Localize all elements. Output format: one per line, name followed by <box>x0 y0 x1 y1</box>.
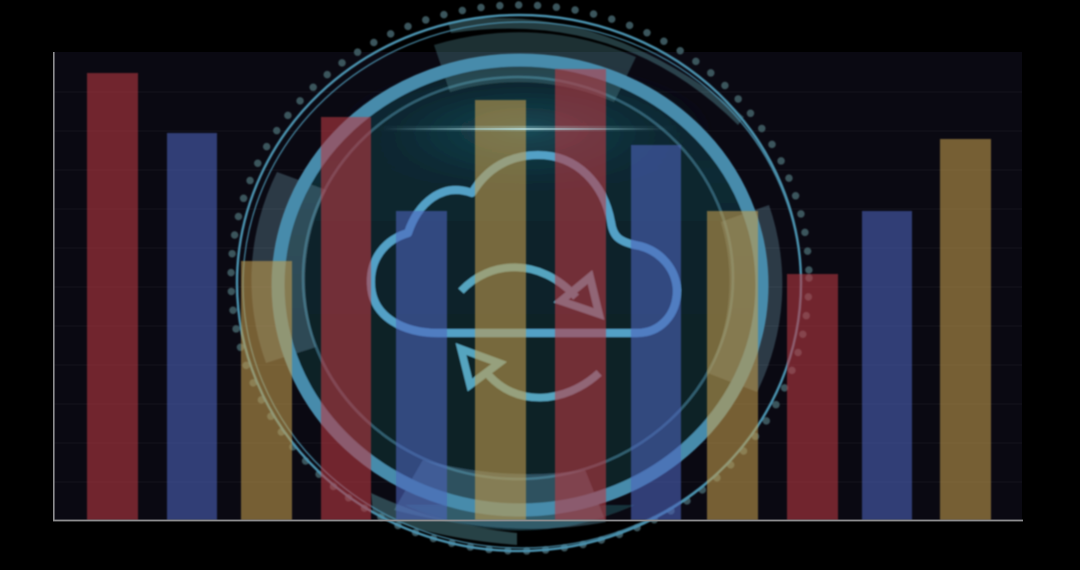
bar 6 <box>475 100 526 520</box>
bar 4 <box>321 117 371 520</box>
bar 5 <box>396 211 447 520</box>
bottom thin sector <box>371 493 517 545</box>
bar chart <box>87 69 991 520</box>
bar 8 <box>631 145 681 520</box>
bar 9 <box>707 211 758 520</box>
cloud outline <box>371 155 677 333</box>
HUD back layer <box>231 5 809 551</box>
bar 1 <box>87 73 138 520</box>
inner disc <box>278 60 762 510</box>
sync arrow upper <box>461 267 599 314</box>
bar 12 <box>940 139 991 520</box>
bar 11 <box>862 211 912 520</box>
bar 10 <box>787 274 838 520</box>
left sector <box>251 172 326 363</box>
bar 3 <box>241 261 292 520</box>
bottom sector <box>394 460 606 529</box>
top thin sector <box>448 18 744 125</box>
right sector <box>708 205 782 392</box>
bar 7 <box>555 69 606 520</box>
top sector <box>434 32 636 102</box>
inner band tint <box>303 77 733 479</box>
bar 2 <box>167 133 217 520</box>
sync arrow lower <box>461 349 599 398</box>
chart plot area <box>54 52 1022 520</box>
chart axes <box>53 52 1023 521</box>
outer double ring <box>237 15 801 551</box>
dark lower halo <box>405 505 635 530</box>
flare glow <box>330 58 720 202</box>
dotted outer ring <box>231 5 809 551</box>
thick ring <box>278 60 762 510</box>
lens flare line <box>375 126 675 131</box>
